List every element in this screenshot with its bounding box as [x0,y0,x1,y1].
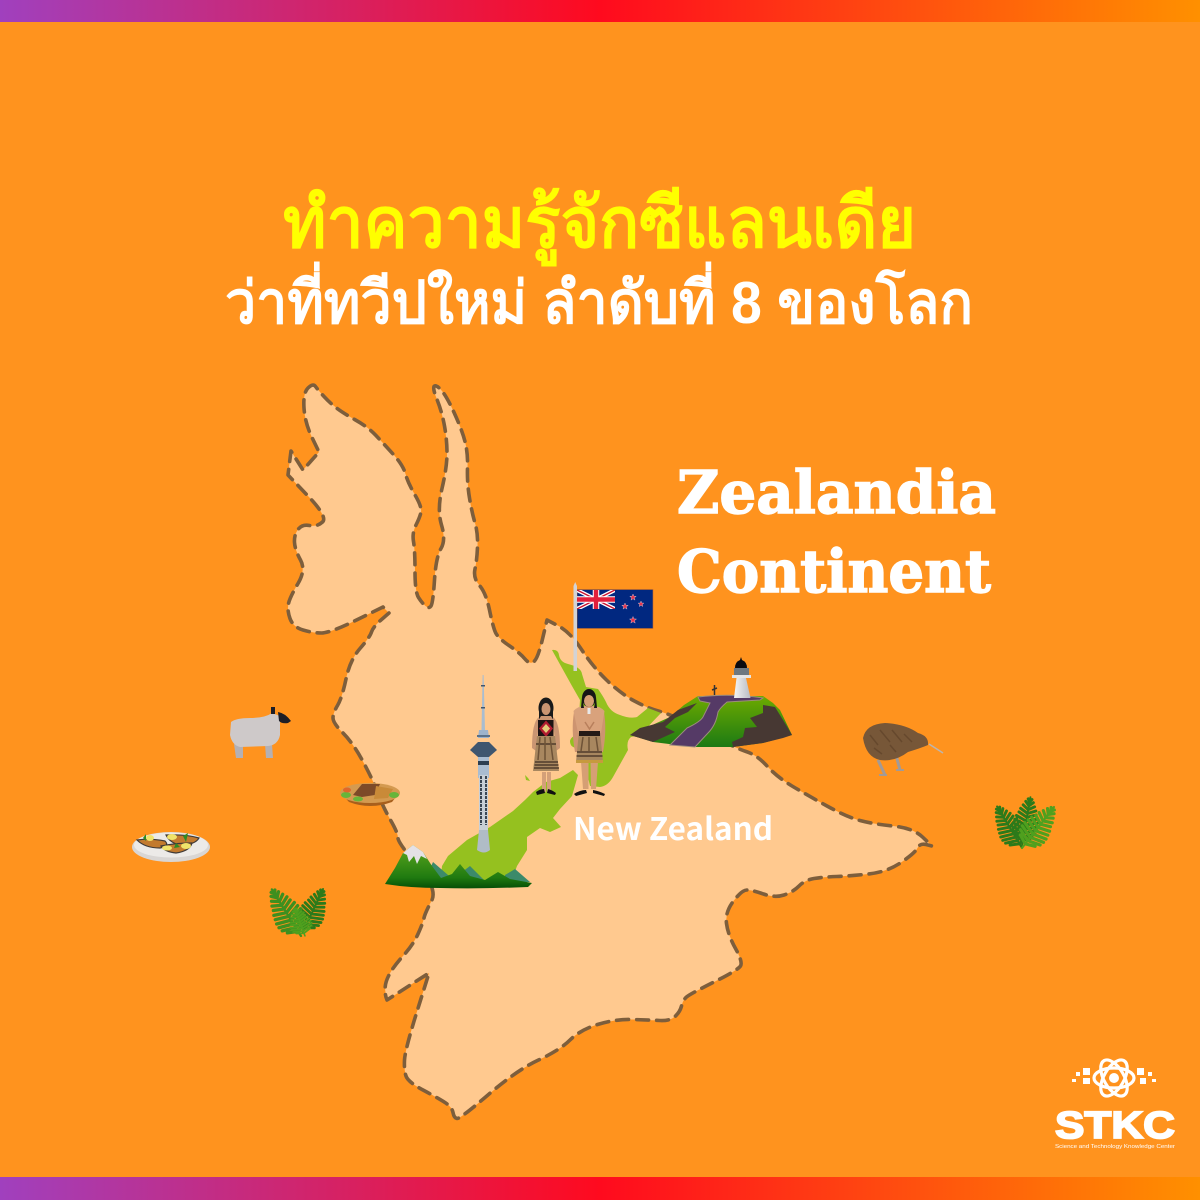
logo: STKC [1055,1056,1175,1150]
icon: bowl of food [340,783,400,806]
heading line 2: Continent [677,537,991,606]
rock right [732,705,792,747]
icon: mountains [385,845,532,888]
icon: fern left [260,882,334,944]
hill [630,696,792,747]
logo wordmark: STKC [1055,1105,1175,1147]
south island [440,770,578,885]
New Zealand landmass [440,650,661,885]
heading line 1: Zealandia [677,458,996,527]
heading: Zealandia Continent [677,458,996,606]
top gradient bar [0,0,1200,22]
road [670,695,763,747]
icon: Maori woman [532,698,560,795]
bottom gradient bar [0,1177,1200,1200]
lighthouse [732,657,751,698]
label: New Zealand: New Zealand [573,804,773,849]
icon: sheep [230,707,291,758]
icon: Maori man [573,689,605,796]
title line 1: ทำความรู้จักซีแลนเดีย [283,184,916,267]
small island [525,775,530,781]
icon: plate of mussels [132,832,210,862]
icon: kiwi bird [863,723,943,775]
signpost [712,685,717,695]
rock left [630,703,697,742]
icon: fern right [986,795,1065,856]
icon: hill with road and lighthouse [630,657,792,747]
icon: sky tower [470,675,497,852]
north island [552,650,661,787]
icon: New Zealand flag [574,582,653,671]
title line 2: ว่าที่ทวีปใหม่ ลำดับที่ 8 ของโลก [225,261,973,336]
logo atom mark [1072,1056,1156,1100]
map: Zealandia continent outline [288,385,932,1119]
logo tagline: Science and Technology Knowledge Center [1055,1144,1175,1150]
title [225,184,973,336]
